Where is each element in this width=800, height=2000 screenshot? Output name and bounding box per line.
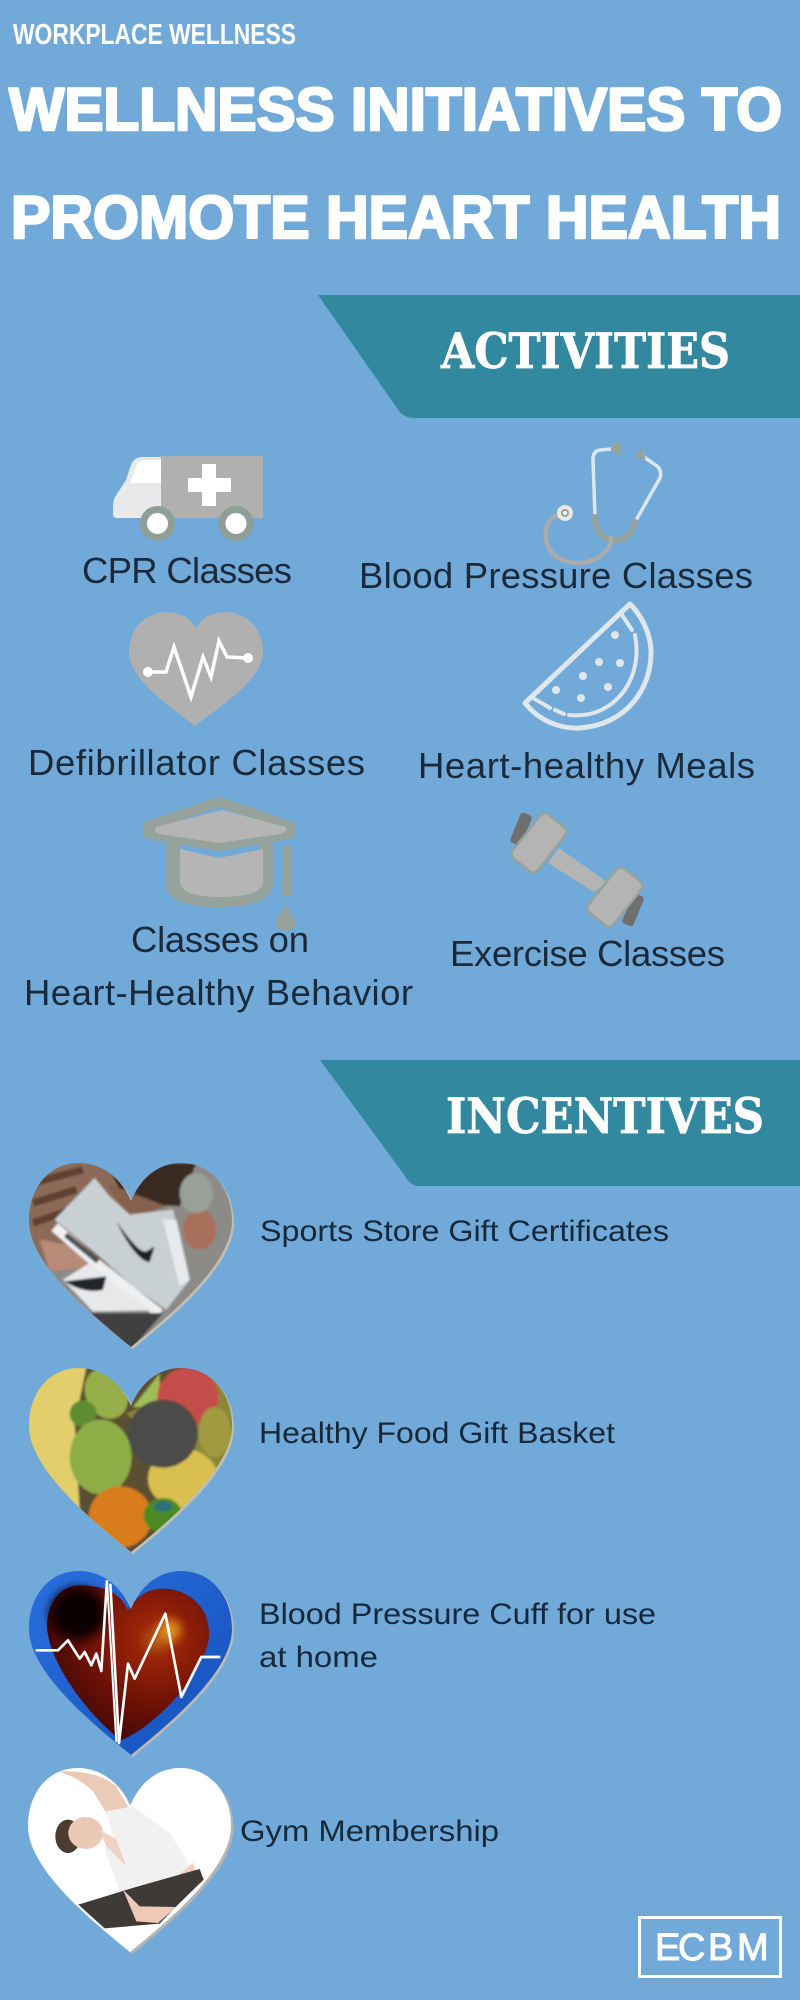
photo heart: fruit [26,1361,240,1554]
label: blood pressure cuff: Blood Pressure Cuff for use [259,1598,656,1631]
icon: stethoscope [546,442,661,563]
photo heart: stretching woman [26,1765,240,1955]
header [9,19,782,251]
label: heart-healthy meals: Heart-healthy Meals [418,745,755,786]
label: blood pressure cuff [259,1598,656,1674]
label: classes on heart-healthy behavior [24,919,413,1013]
label: defibrillator classes: Defibrillator Classes [28,742,365,783]
panel: incentives [26,1060,800,1955]
kicker: workplace wellness: WORKPLACE WELLNESS [13,19,296,51]
heading banner: incentives [320,1060,800,1186]
panel: activities [24,295,800,1013]
logo: ECBM: ECBM [655,1927,769,1969]
logo: ECBM [640,1918,780,1976]
photo heart: cardiogram [26,1567,240,1757]
heading banner: activities [318,295,800,418]
label: gym membership: Gym Membership [240,1815,499,1848]
label: healthy food gift basket: Healthy Food Gift Basket [259,1417,616,1450]
title [9,76,782,251]
label: classes on heart-healthy behavior: Classes on [131,919,309,960]
label: blood pressure classes: Blood Pressure Classes [359,555,753,596]
label: sports store gift certificates: Sports Store Gift Certificates [260,1215,669,1248]
icon: watermelon [525,604,651,728]
icon: graduation cap [148,802,295,931]
label: blood pressure cuff: at home [259,1641,378,1674]
title: WELLNESS INITIATIVES TO [9,76,782,143]
icon: heart with pulse [129,612,263,726]
label: CPR classes: CPR Classes [82,550,292,591]
photo heart: sneaker [26,1160,240,1350]
heading banner: activities: ACTIVITIES [440,322,730,380]
title: PROMOTE HEART HEALTH [11,184,781,251]
label: exercise classes: Exercise Classes [450,933,725,974]
icon: dumbbell [509,811,645,929]
label: classes on heart-healthy behavior: Heart-Healthy Behavior [24,972,413,1013]
heading banner: incentives: INCENTIVES [446,1087,764,1145]
icon: ambulance [113,456,263,538]
